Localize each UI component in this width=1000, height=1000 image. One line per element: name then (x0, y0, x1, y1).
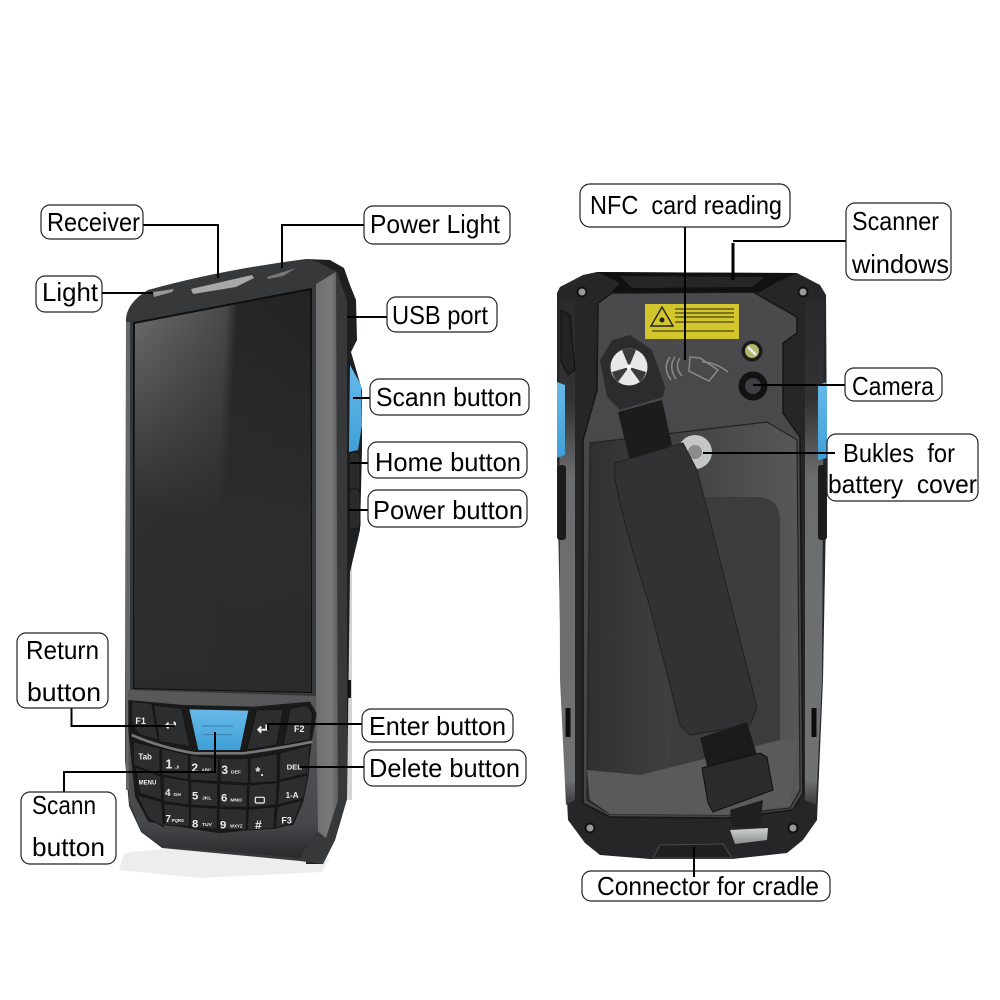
screw bottom left (586, 824, 594, 832)
7 key (164, 803, 189, 827)
strap upper leather (600, 335, 665, 410)
1-A key (277, 775, 308, 805)
label: USB port: USB port (392, 300, 489, 330)
back phone (557, 272, 827, 859)
blue scan key (189, 709, 248, 750)
4 key: GH (173, 792, 181, 798)
enter key: ↵ (257, 722, 270, 739)
laser warning label (645, 304, 739, 339)
left blue button (557, 382, 565, 458)
label: Scann button left (21, 790, 116, 864)
label: NFC card reading (580, 184, 790, 227)
silver latch (730, 828, 768, 844)
flash (742, 340, 762, 362)
F2 key (283, 705, 313, 745)
label: Return button (17, 633, 108, 708)
keypad (128, 700, 317, 833)
power side button (349, 489, 360, 529)
8 key: TUV (202, 822, 213, 828)
label: Scann button left: button (32, 832, 105, 862)
label: Power Light: Power Light (370, 209, 501, 239)
9 key (219, 808, 247, 831)
9 key: 9 (220, 819, 226, 831)
lower side slots (568, 708, 814, 737)
DEL key: DEL (287, 762, 302, 771)
front light (153, 289, 174, 297)
screen (134, 289, 311, 692)
home side button (349, 452, 360, 496)
3 key (220, 758, 248, 783)
8 key (191, 807, 217, 830)
right side strip (805, 300, 824, 805)
7 key: PQRS (172, 818, 184, 823)
label: Scanner windows: Scanner (852, 206, 939, 236)
blank key (137, 795, 163, 827)
8 key: 8 (192, 818, 198, 830)
7 key: 7 (165, 814, 171, 825)
left side strip (559, 300, 575, 805)
2 key: 2 (191, 761, 198, 775)
F1 key (132, 702, 158, 740)
5 key (191, 782, 218, 807)
label: Return button: button (27, 677, 101, 707)
divider bar (132, 735, 313, 753)
6 key: 6 (221, 792, 227, 804)
screw bottom right (788, 824, 798, 832)
MENU key: MENU (139, 781, 156, 787)
label: Scanner windows (846, 203, 951, 280)
label: Camera: Camera (852, 371, 934, 401)
dark inner battery recess (670, 497, 780, 768)
receiver grille (191, 275, 254, 294)
hash key: # (255, 818, 262, 832)
return key: ↩ (165, 718, 177, 734)
battery buckle (678, 435, 712, 469)
star key: *. (255, 765, 264, 779)
bevel right panel (316, 272, 338, 838)
top scanner hood (597, 272, 797, 292)
enter key (247, 709, 283, 750)
camera lens (738, 371, 768, 401)
label: Enter button: Enter button (369, 711, 506, 741)
2 key: ABC (202, 767, 211, 772)
scanner window band (620, 276, 765, 288)
back panel (583, 292, 803, 818)
left edge highlight (126, 322, 130, 790)
3 key: DEF (231, 769, 241, 775)
label: Connector for cradle: Connector for cradle (597, 871, 819, 901)
return key (153, 705, 190, 747)
star key (250, 753, 277, 783)
screw top left (578, 288, 586, 296)
keypad tray (128, 700, 317, 833)
light lower area (587, 740, 797, 815)
strap end band (730, 800, 763, 827)
leader lines over labels (694, 453, 835, 877)
strap band upper (618, 400, 672, 462)
4 key: 4 (165, 788, 171, 799)
back body (557, 272, 827, 859)
power light (267, 268, 296, 279)
front phone (119, 259, 362, 878)
1 key: 1 (165, 757, 172, 771)
left side buttons (557, 465, 566, 540)
Tab key: Tab (138, 752, 152, 761)
right blue button (818, 382, 827, 460)
F2 key: F2 (294, 724, 304, 734)
label: Bukles for battery cover (827, 434, 978, 501)
strap lower tab (702, 753, 773, 812)
right side shell (306, 259, 362, 864)
F1 key: F1 (135, 716, 146, 726)
hash key (247, 807, 275, 832)
6 key: MNO (230, 797, 242, 803)
faint right edge strip (346, 560, 352, 800)
5 key: JKL (202, 795, 211, 801)
cradle connector (653, 844, 732, 858)
screen fade (134, 289, 311, 692)
screw top right (798, 288, 808, 296)
label: Scann button left: Scann (32, 790, 96, 820)
label: Bukles for battery cover: battery cover (828, 469, 977, 499)
lower bezel (128, 690, 318, 858)
label: NFC card reading: NFC card reading (590, 190, 782, 220)
MENU key (135, 767, 162, 800)
4 key (163, 777, 189, 805)
2 key (190, 755, 218, 782)
blue scan side button (349, 365, 362, 452)
right side buttons (818, 465, 827, 540)
1 key (162, 748, 188, 780)
3 key: 3 (221, 763, 228, 777)
leader lines (64, 225, 846, 792)
label: Receiver: Receiver (47, 207, 140, 237)
label: Scann button right: Scann button (376, 382, 522, 412)
floor shadow (119, 845, 330, 878)
strap knob (610, 348, 648, 386)
front body (125, 259, 347, 864)
label: Bukles for battery cover: Bukles for (843, 438, 955, 468)
label: Power button: Power button (373, 495, 523, 525)
label: Return button: Return (26, 635, 99, 665)
Tab key (133, 742, 160, 775)
battery cover area (587, 422, 800, 815)
strap band lower (700, 722, 757, 770)
label: Delete button: Delete button (369, 753, 520, 783)
label: Home button: Home button (375, 447, 521, 477)
9 key: WXYZ (230, 824, 243, 829)
5 key: 5 (192, 790, 198, 802)
F3 key: F3 (281, 815, 292, 825)
label: Light: Light (42, 277, 99, 307)
zero key (248, 783, 277, 807)
6 key (219, 783, 248, 807)
F3 key (275, 800, 303, 828)
DEL key (279, 745, 310, 780)
left side SIM door (561, 310, 575, 375)
slot on right side (348, 680, 351, 698)
NFC icon (666, 357, 728, 381)
1-A key: 1-A (286, 791, 299, 800)
strap leather pad (615, 443, 757, 735)
label: Scanner windows: windows (851, 249, 949, 279)
1 key: .,0 (174, 765, 180, 770)
